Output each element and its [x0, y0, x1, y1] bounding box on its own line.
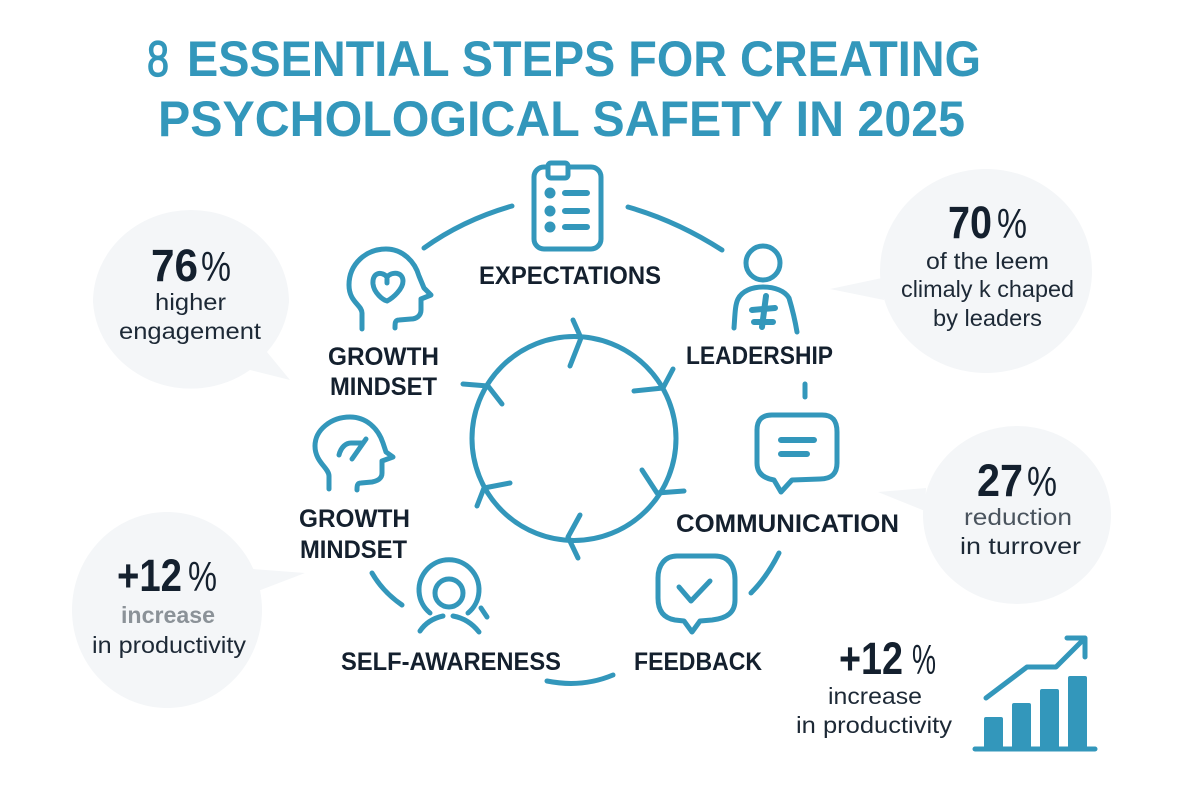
callout: +12% increase in productivity: % [188, 553, 217, 600]
step: leadership [686, 246, 833, 370]
callout: +12% increase in productivity: increase [121, 602, 215, 628]
callout: 70% team climate shaped by leaders: by leaders [933, 305, 1042, 331]
callout: 76% higher engagement: higher [155, 289, 226, 315]
callout: 76% higher engagement: % [201, 243, 231, 290]
icon: head with heart [349, 249, 431, 329]
icon: speech bubble with lines [757, 415, 837, 492]
stat: +12% increase in productivity: increase [828, 683, 922, 709]
callout: 76% higher engagement [93, 210, 290, 389]
label: leadership: LEADERSHIP [686, 342, 833, 370]
step: growth mindset (upper) [328, 249, 439, 401]
stat: +12% increase in productivity: in productivity [796, 712, 953, 738]
icon: head with gauge [315, 417, 393, 490]
central cycle circle with arrows [463, 320, 684, 558]
label: growth mindset lower: GROWTH [299, 505, 410, 533]
callout: 76% higher engagement: 76 [151, 240, 198, 291]
callout: +12% increase in productivity: in productivity [92, 632, 247, 658]
stat: +12% increase in productivity: +12 [839, 633, 903, 684]
label: expectations: EXPECTATIONS [479, 262, 661, 290]
callout: 70% team climate shaped by leaders [830, 169, 1092, 373]
label: growth mindset upper: MINDSET [330, 373, 437, 401]
step: self-awareness [341, 560, 561, 676]
callout: 70% team climate shaped by leaders: 70 [948, 197, 992, 248]
title [147, 31, 981, 147]
icon: clipboard [534, 163, 601, 249]
icon: person with ring [419, 560, 487, 632]
icon: person [734, 246, 797, 332]
label: growth mindset upper [328, 343, 439, 401]
callout: 27% reduction in turnover: in turrover [960, 533, 1081, 559]
step: expectations [479, 163, 661, 290]
callout: 27% reduction in turnover: reduction [964, 504, 1072, 530]
title: PSYCHOLOGICAL SAFETY IN 2025 [158, 91, 965, 147]
label: communication: COMMUNICATION [676, 510, 899, 538]
label: growth mindset lower [299, 505, 410, 564]
callout: +12% increase in productivity [72, 512, 305, 708]
stat: +12% increase in productivity [796, 633, 953, 738]
callout: 70% team climate shaped by leaders: climaly k chaped [901, 276, 1074, 302]
outer cycle arcs [372, 206, 805, 683]
stat: +12% increase in productivity: % [912, 636, 936, 683]
callout: 70% team climate shaped by leaders: of the leem [926, 248, 1049, 274]
icon: bar chart with rising arrow [975, 638, 1095, 749]
callout: 76% higher engagement: engagement [119, 318, 262, 344]
step: growth mindset (lower) [299, 417, 410, 564]
callout: 70% team climate shaped by leaders: % [997, 200, 1027, 247]
step: feedback [634, 556, 762, 676]
label: growth mindset upper: GROWTH [328, 343, 439, 371]
label: feedback: FEEDBACK [634, 648, 762, 676]
icon: speech bubble with check [658, 556, 735, 632]
step: communication [676, 415, 899, 538]
callout: +12% increase in productivity: +12 [117, 550, 182, 601]
label: growth mindset lower: MINDSET [300, 536, 407, 564]
title: 8 [147, 31, 169, 87]
label: self-awareness: SELF-AWARENESS [341, 648, 561, 676]
callout: 27% reduction in turnover: 27 [977, 455, 1023, 506]
title: ESSENTIAL STEPS FOR CREATING [187, 31, 981, 87]
callout: 27% reduction in turnover [878, 426, 1111, 604]
callout: 27% reduction in turnover: % [1027, 458, 1057, 505]
